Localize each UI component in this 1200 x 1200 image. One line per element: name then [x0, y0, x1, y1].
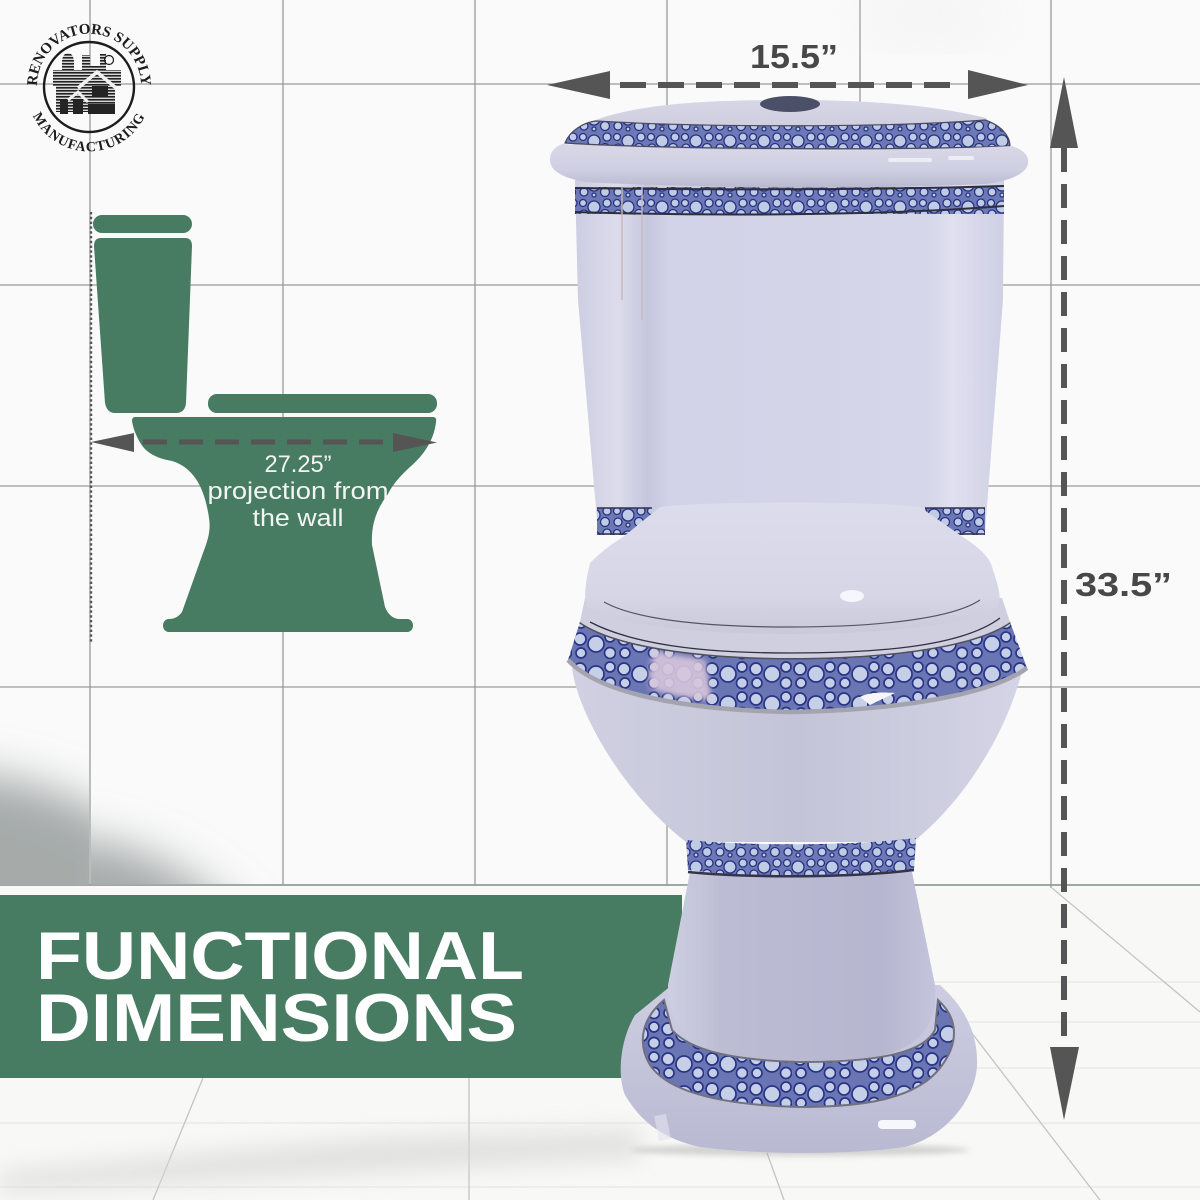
pedestal	[668, 872, 935, 1061]
wall reference dotted line	[90, 212, 92, 642]
icon: green toilet side-view silhouette	[93, 215, 437, 632]
tank lid	[550, 96, 1028, 188]
toilet tank	[575, 180, 1004, 535]
tiled floor background	[0, 888, 1200, 1200]
logo: Renovators Supply Manufacturing: RENOVATORS SUPPLY	[27, 24, 151, 86]
text: projection dimension label	[208, 451, 388, 532]
photo: decorated lavender two-piece toilet	[550, 96, 1028, 1153]
banner: green title band	[0, 895, 682, 1078]
text: projection dimension label: 27.25”	[264, 451, 332, 478]
arrow: height dimension	[1050, 77, 1079, 1120]
title: Functional Dimensions	[36, 918, 524, 1056]
neck band	[686, 838, 916, 876]
title: Functional Dimensions: FUNCTIONAL	[36, 918, 524, 994]
logo: Renovators Supply Manufacturing	[27, 24, 151, 152]
text: height 33.5 inches: 33.5”	[1075, 566, 1172, 603]
text: projection dimension label: the wall	[252, 505, 344, 532]
toilet seat and lid	[580, 502, 1010, 658]
base of bowl	[621, 985, 977, 1153]
title: Functional Dimensions: DIMENSIONS	[36, 980, 517, 1056]
text: projection dimension label: projection from	[208, 478, 388, 505]
logo: Renovators Supply Manufacturing: MANUFACTURING	[32, 111, 144, 152]
text: width 15.5 inches: 15.5”	[750, 38, 838, 75]
bowl decorative band	[568, 622, 1027, 712]
icon: house in logo	[53, 53, 121, 114]
bowl	[572, 668, 1022, 842]
arrow: width dimension	[547, 70, 1028, 99]
tiled wall background	[0, 0, 1200, 888]
arrow: wall projection dimension	[91, 433, 437, 452]
